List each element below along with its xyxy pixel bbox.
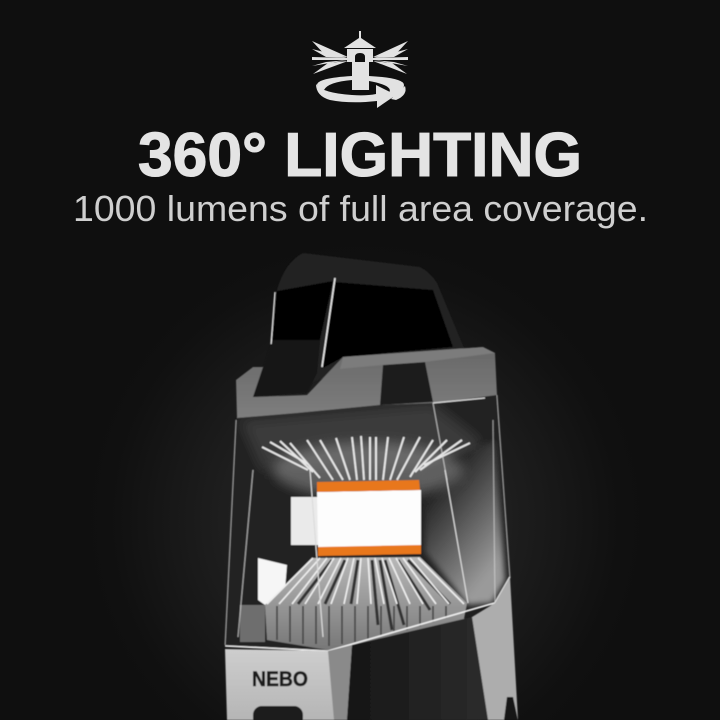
right leg notch	[504, 697, 518, 720]
right glass panel	[425, 440, 505, 605]
subtitle: 1000 lumens of full area coverage.	[73, 188, 648, 229]
upper heat sink fins	[262, 436, 470, 480]
main light panel	[317, 490, 421, 548]
glass tint above fins	[240, 403, 480, 470]
lantern product illustration	[225, 253, 518, 720]
lower fins	[267, 558, 464, 604]
title: 360° LIGHTING	[138, 121, 582, 190]
lower heat sink	[265, 557, 467, 650]
glass interior lighting	[240, 403, 505, 605]
interior glow	[273, 442, 463, 498]
power button	[253, 706, 303, 720]
NEBO logo: NEBO	[252, 668, 308, 691]
orange bands	[317, 480, 421, 556]
lower fin shadows	[298, 560, 450, 630]
handle	[253, 253, 464, 400]
top cap	[236, 347, 497, 418]
glass body	[225, 395, 510, 650]
background glow	[60, 220, 680, 720]
icon: lighthouse with rotating arrow	[312, 31, 408, 108]
vertical ribs	[277, 606, 446, 646]
base centre gap	[347, 617, 488, 720]
base right leg	[472, 577, 518, 720]
side reflections	[240, 497, 319, 642]
glass edge highlights	[225, 395, 510, 651]
base shaded facet	[328, 645, 352, 720]
base left leg	[225, 645, 352, 720]
